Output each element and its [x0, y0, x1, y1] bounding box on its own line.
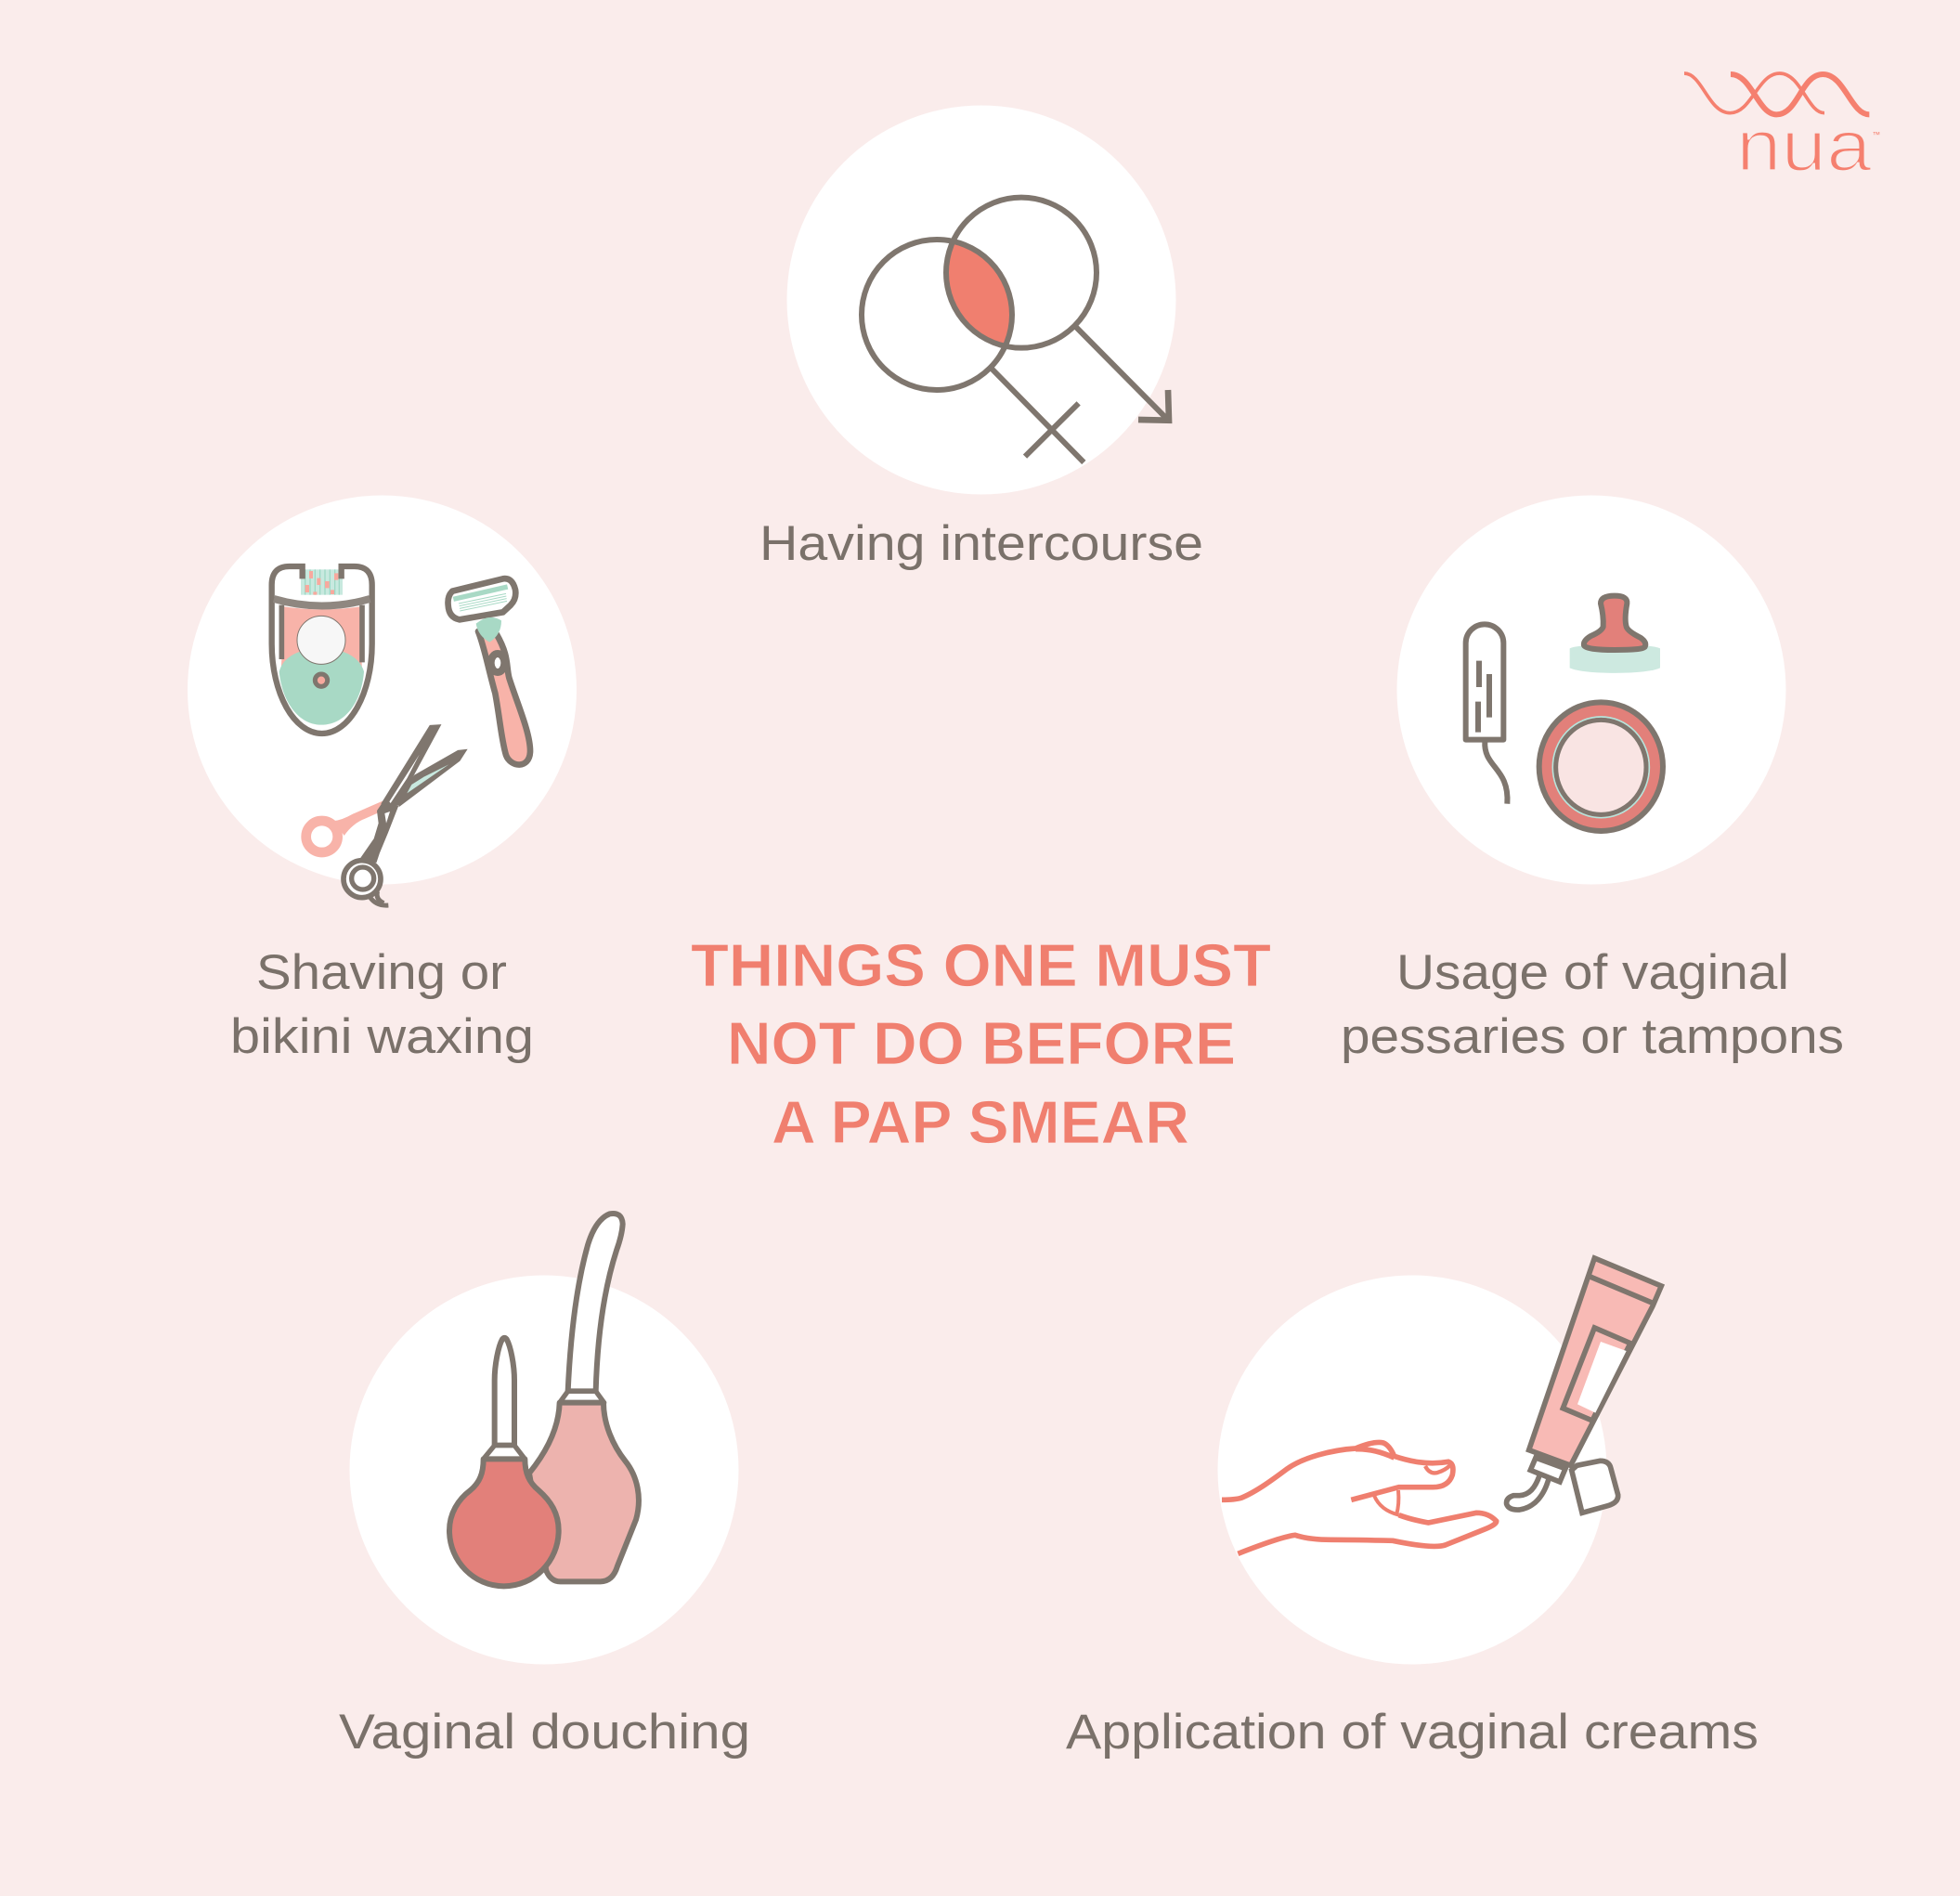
logo: nua: ™ — [1873, 130, 1880, 139]
title: A PAP SMEAR — [772, 1088, 1189, 1156]
label: having intercourse: Having intercourse — [759, 516, 1203, 571]
icon: pessary with stem — [1570, 596, 1660, 673]
logo: nua: nua — [1736, 105, 1872, 187]
white circle: pessaries — [1396, 496, 1786, 884]
label: application of vaginal creams: Application of vaginal creams — [1066, 1705, 1759, 1760]
white circle: creams — [1218, 1276, 1606, 1664]
icon: cream tube — [1507, 1258, 1661, 1513]
icon: tampon — [1466, 624, 1508, 804]
icon: venus and mars symbols — [862, 198, 1169, 462]
title: THINGS ONE MUST — [691, 931, 1271, 999]
icon: small douche bulb — [449, 1338, 559, 1586]
icon: pessary ring — [1539, 702, 1663, 831]
icon: scissors — [306, 725, 467, 905]
label: vaginal douching: Vaginal douching — [339, 1705, 750, 1760]
panel: application of vaginal creams — [1066, 1258, 1759, 1760]
title: NOT DO BEFORE — [727, 1009, 1236, 1077]
white circle: douching — [349, 1276, 739, 1664]
label: usage of vaginal pessaries or tampons — [1341, 945, 1844, 1064]
label: shaving or bikini waxing: bikini waxing — [230, 1009, 534, 1064]
icon: hand — [1222, 1442, 1497, 1553]
panel: shaving or bikini waxing — [188, 496, 577, 1064]
title — [691, 931, 1271, 1156]
icon: razor — [448, 578, 530, 765]
label: shaving or bikini waxing — [230, 945, 534, 1064]
panel: having intercourse — [759, 106, 1203, 571]
panel: vaginal douching — [339, 1214, 750, 1760]
icon: large douche bulb — [529, 1214, 639, 1581]
white circle: shaving — [188, 496, 577, 884]
label: usage of vaginal pessaries or tampons: Usage of vaginal — [1396, 945, 1789, 1000]
label: shaving or bikini waxing: Shaving or — [256, 945, 507, 1000]
panel: vaginal pessaries or tampons — [1341, 496, 1844, 1064]
white circle: intercourse — [787, 106, 1175, 494]
icon: epilator — [272, 566, 372, 734]
logo: nua — [1684, 73, 1880, 187]
label: usage of vaginal pessaries or tampons: pessaries or tampons — [1341, 1009, 1844, 1064]
